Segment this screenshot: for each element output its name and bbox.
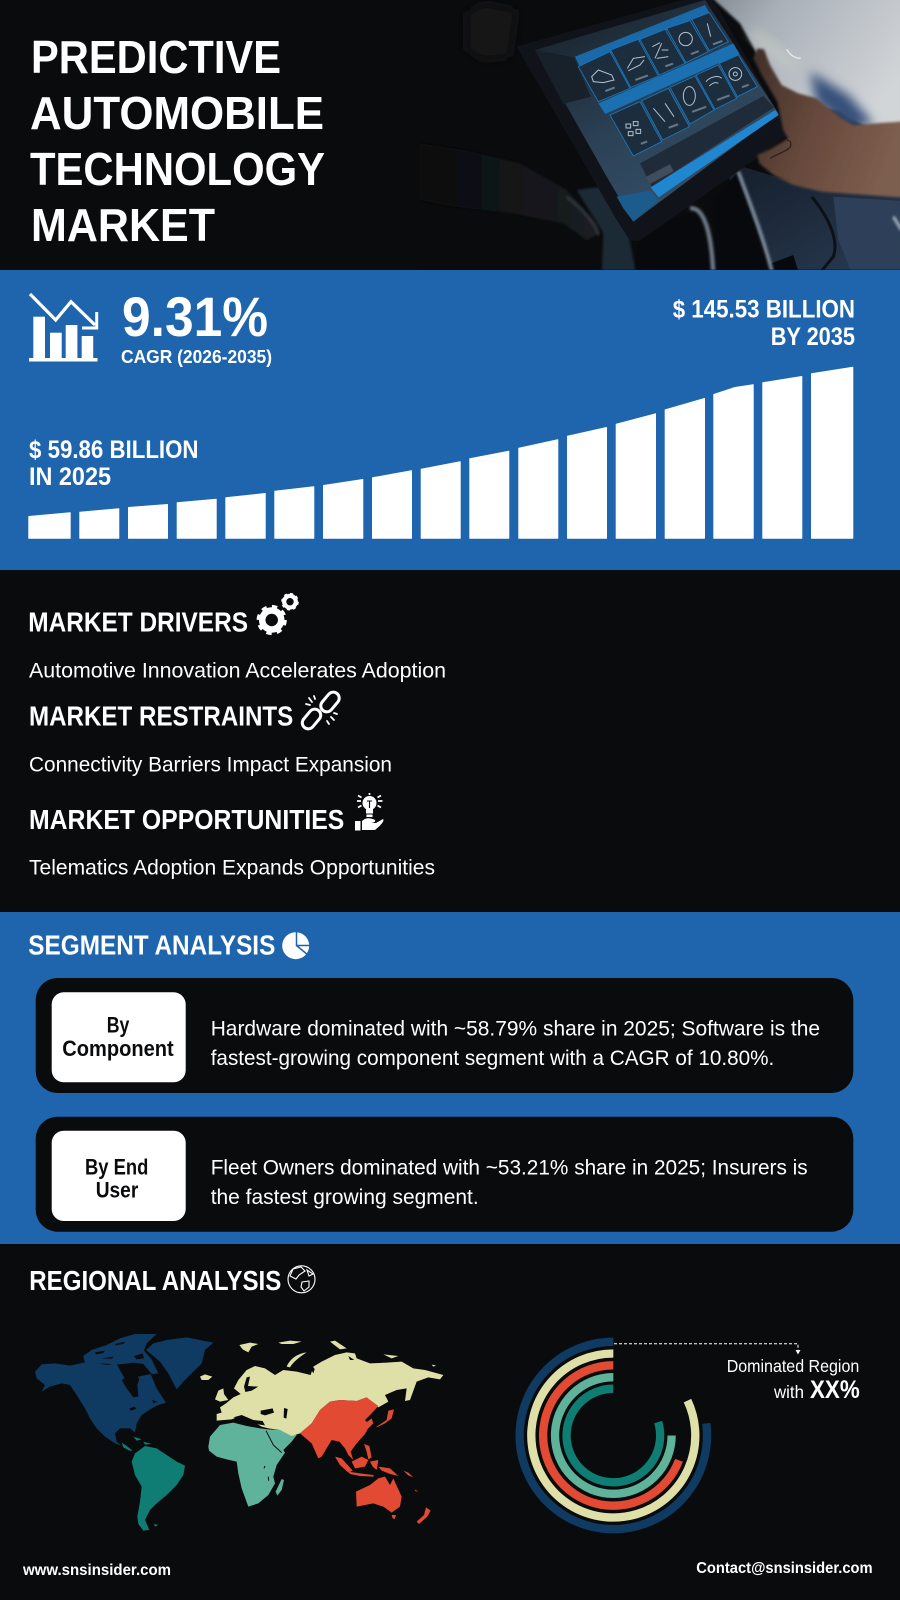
icon: globe xyxy=(288,1266,315,1293)
by component description: Hardware dominated with ~58.79% share in 2025; Software is the xyxy=(211,1017,820,1041)
map region: Asia Pacific xyxy=(300,1397,431,1524)
by component description: fastest-growing component segment with a CAGR of 10.80%. xyxy=(211,1046,774,1070)
by end user description xyxy=(211,1156,808,1209)
footer: contact email: Contact@snsinsider.com xyxy=(696,1560,873,1577)
2025 market value: IN 2025 xyxy=(29,463,111,491)
map region: Europe and Northern Asia xyxy=(200,1341,443,1436)
icon: gears xyxy=(258,594,298,634)
icon: light bulb over hand xyxy=(355,793,383,830)
2025 market value: $ 59.86 BILLION xyxy=(29,436,198,464)
radial bar chart xyxy=(520,1342,707,1529)
map region: Africa and Middle East xyxy=(208,1423,297,1507)
2035 market value xyxy=(673,296,855,351)
footer: website: www.snsinsider.com xyxy=(22,1562,171,1579)
CAGR value: 9.31% xyxy=(122,285,268,348)
callout: dominated region: with xyxy=(773,1382,804,1402)
callout: dominated region: Dominated Region xyxy=(727,1356,859,1376)
2035 market value: $ 145.53 BILLION xyxy=(673,296,855,324)
title: MARKET xyxy=(31,199,215,251)
callout: dominated region: XX% xyxy=(810,1376,860,1404)
market opportunities text: Telematics Adoption Expands Opportunities xyxy=(29,856,435,880)
by component label box: Component xyxy=(62,1036,174,1061)
by component card background xyxy=(36,978,853,1093)
title xyxy=(30,31,325,251)
arrow: dashed leader to callout xyxy=(614,1344,800,1354)
callout: dominated region xyxy=(727,1356,860,1404)
panel: regional analysis xyxy=(29,1265,860,1531)
market drivers heading: MARKET DRIVERS xyxy=(28,607,248,638)
segment analysis heading: SEGMENT ANALYSIS xyxy=(28,929,275,960)
icon: pie chart xyxy=(282,931,310,959)
market opportunities heading: MARKET OPPORTUNITIES xyxy=(29,804,344,835)
by end user label box: User xyxy=(96,1177,139,1202)
map region: Central and South America xyxy=(122,1437,185,1531)
title: PREDICTIVE xyxy=(31,31,281,83)
by end user description: the fastest growing segment. xyxy=(211,1185,479,1209)
panel: segment analysis xyxy=(0,912,900,1244)
by end user label box xyxy=(52,1131,186,1221)
2035 market value: BY 2035 xyxy=(771,323,855,351)
segment analysis background xyxy=(0,912,900,1244)
by component description xyxy=(211,1017,820,1070)
card: by end user xyxy=(36,1117,853,1232)
title: TECHNOLOGY xyxy=(30,143,325,195)
by end user label box: By End xyxy=(85,1154,148,1179)
world map xyxy=(35,1334,443,1531)
by end user description: Fleet Owners dominated with ~53.21% share in 2025; Insurers is xyxy=(211,1156,808,1180)
by end user card background xyxy=(36,1117,853,1232)
panel: market size xyxy=(0,270,900,570)
regional analysis heading: REGIONAL ANALYSIS xyxy=(29,1265,281,1296)
bar chart: market growth xyxy=(29,367,853,538)
market size background xyxy=(0,270,900,570)
map detail: Red Sea and lakes xyxy=(264,1431,282,1481)
2025 market value xyxy=(29,436,198,491)
icon: bar chart with trend arrow xyxy=(29,294,98,362)
header photo: hand holding a diagnostic tablet in a car xyxy=(420,0,900,277)
panel: market dynamics xyxy=(28,594,446,880)
map region: North America xyxy=(35,1334,213,1446)
CAGR period label: CAGR (2026-2035) xyxy=(121,346,272,367)
market restraints heading: MARKET RESTRAINTS xyxy=(29,701,293,732)
card: by component xyxy=(36,978,853,1093)
title: AUTOMOBILE xyxy=(30,87,324,139)
panel: header xyxy=(30,0,900,277)
icon: broken chain link xyxy=(300,690,342,731)
by component label box xyxy=(52,992,186,1082)
market restraints text: Connectivity Barriers Impact Expansion xyxy=(29,752,392,776)
market drivers text: Automotive Innovation Accelerates Adoption xyxy=(29,658,446,682)
by component label box: By xyxy=(107,1013,130,1038)
